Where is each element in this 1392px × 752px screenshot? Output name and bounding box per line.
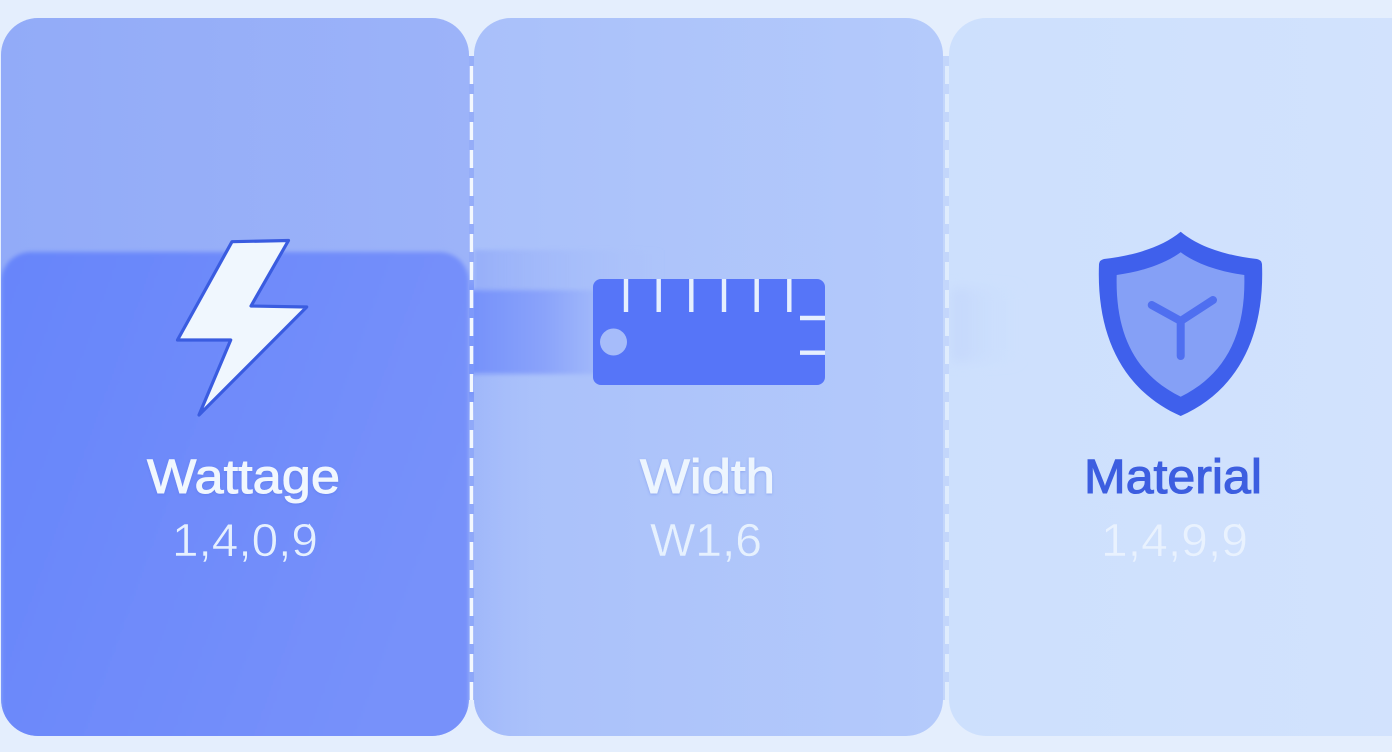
icon: shield [1099, 232, 1262, 416]
heading: wattage: Wattage [147, 451, 340, 504]
gap fill between panels one and two [465, 56, 478, 700]
value: wattage: 1,4,0,9 [172, 514, 318, 566]
heading: material: Material [1084, 451, 1262, 504]
panel: wattage [1, 18, 469, 752]
divider: dashed line one [470, 66, 473, 700]
panel: width [470, 18, 943, 736]
value: material: 1,4,9,9 [1101, 514, 1248, 566]
icon: lightning bolt [178, 240, 307, 415]
icon: ruler [593, 279, 825, 385]
divider: dashed line two [945, 66, 949, 700]
gap fill between panels two and three [940, 56, 952, 700]
heading: width: Width [640, 451, 775, 504]
value: width: W1,6 [650, 514, 762, 566]
panel: material [949, 18, 1392, 736]
